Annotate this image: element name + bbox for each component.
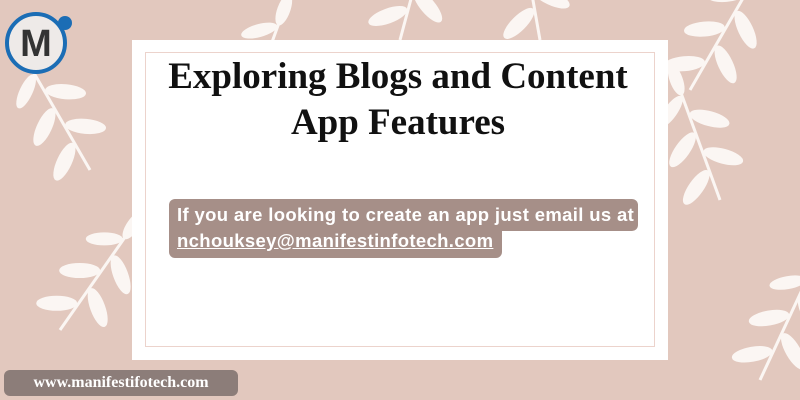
title <box>168 56 628 143</box>
logo <box>5 12 72 74</box>
website label <box>4 370 238 396</box>
logo: M <box>20 23 52 65</box>
inner frame <box>145 52 655 347</box>
main card <box>132 40 668 360</box>
website label: www.manifestifotech.com <box>33 374 209 391</box>
title: Exploring Blogs and Content <box>168 56 628 97</box>
title: App Features <box>291 102 505 143</box>
callout: contact: nchouksey@manifestinfotech.com <box>177 230 493 251</box>
callout: contact <box>169 199 638 258</box>
callout: contact: If you are looking to create an app just email us at <box>177 204 634 225</box>
